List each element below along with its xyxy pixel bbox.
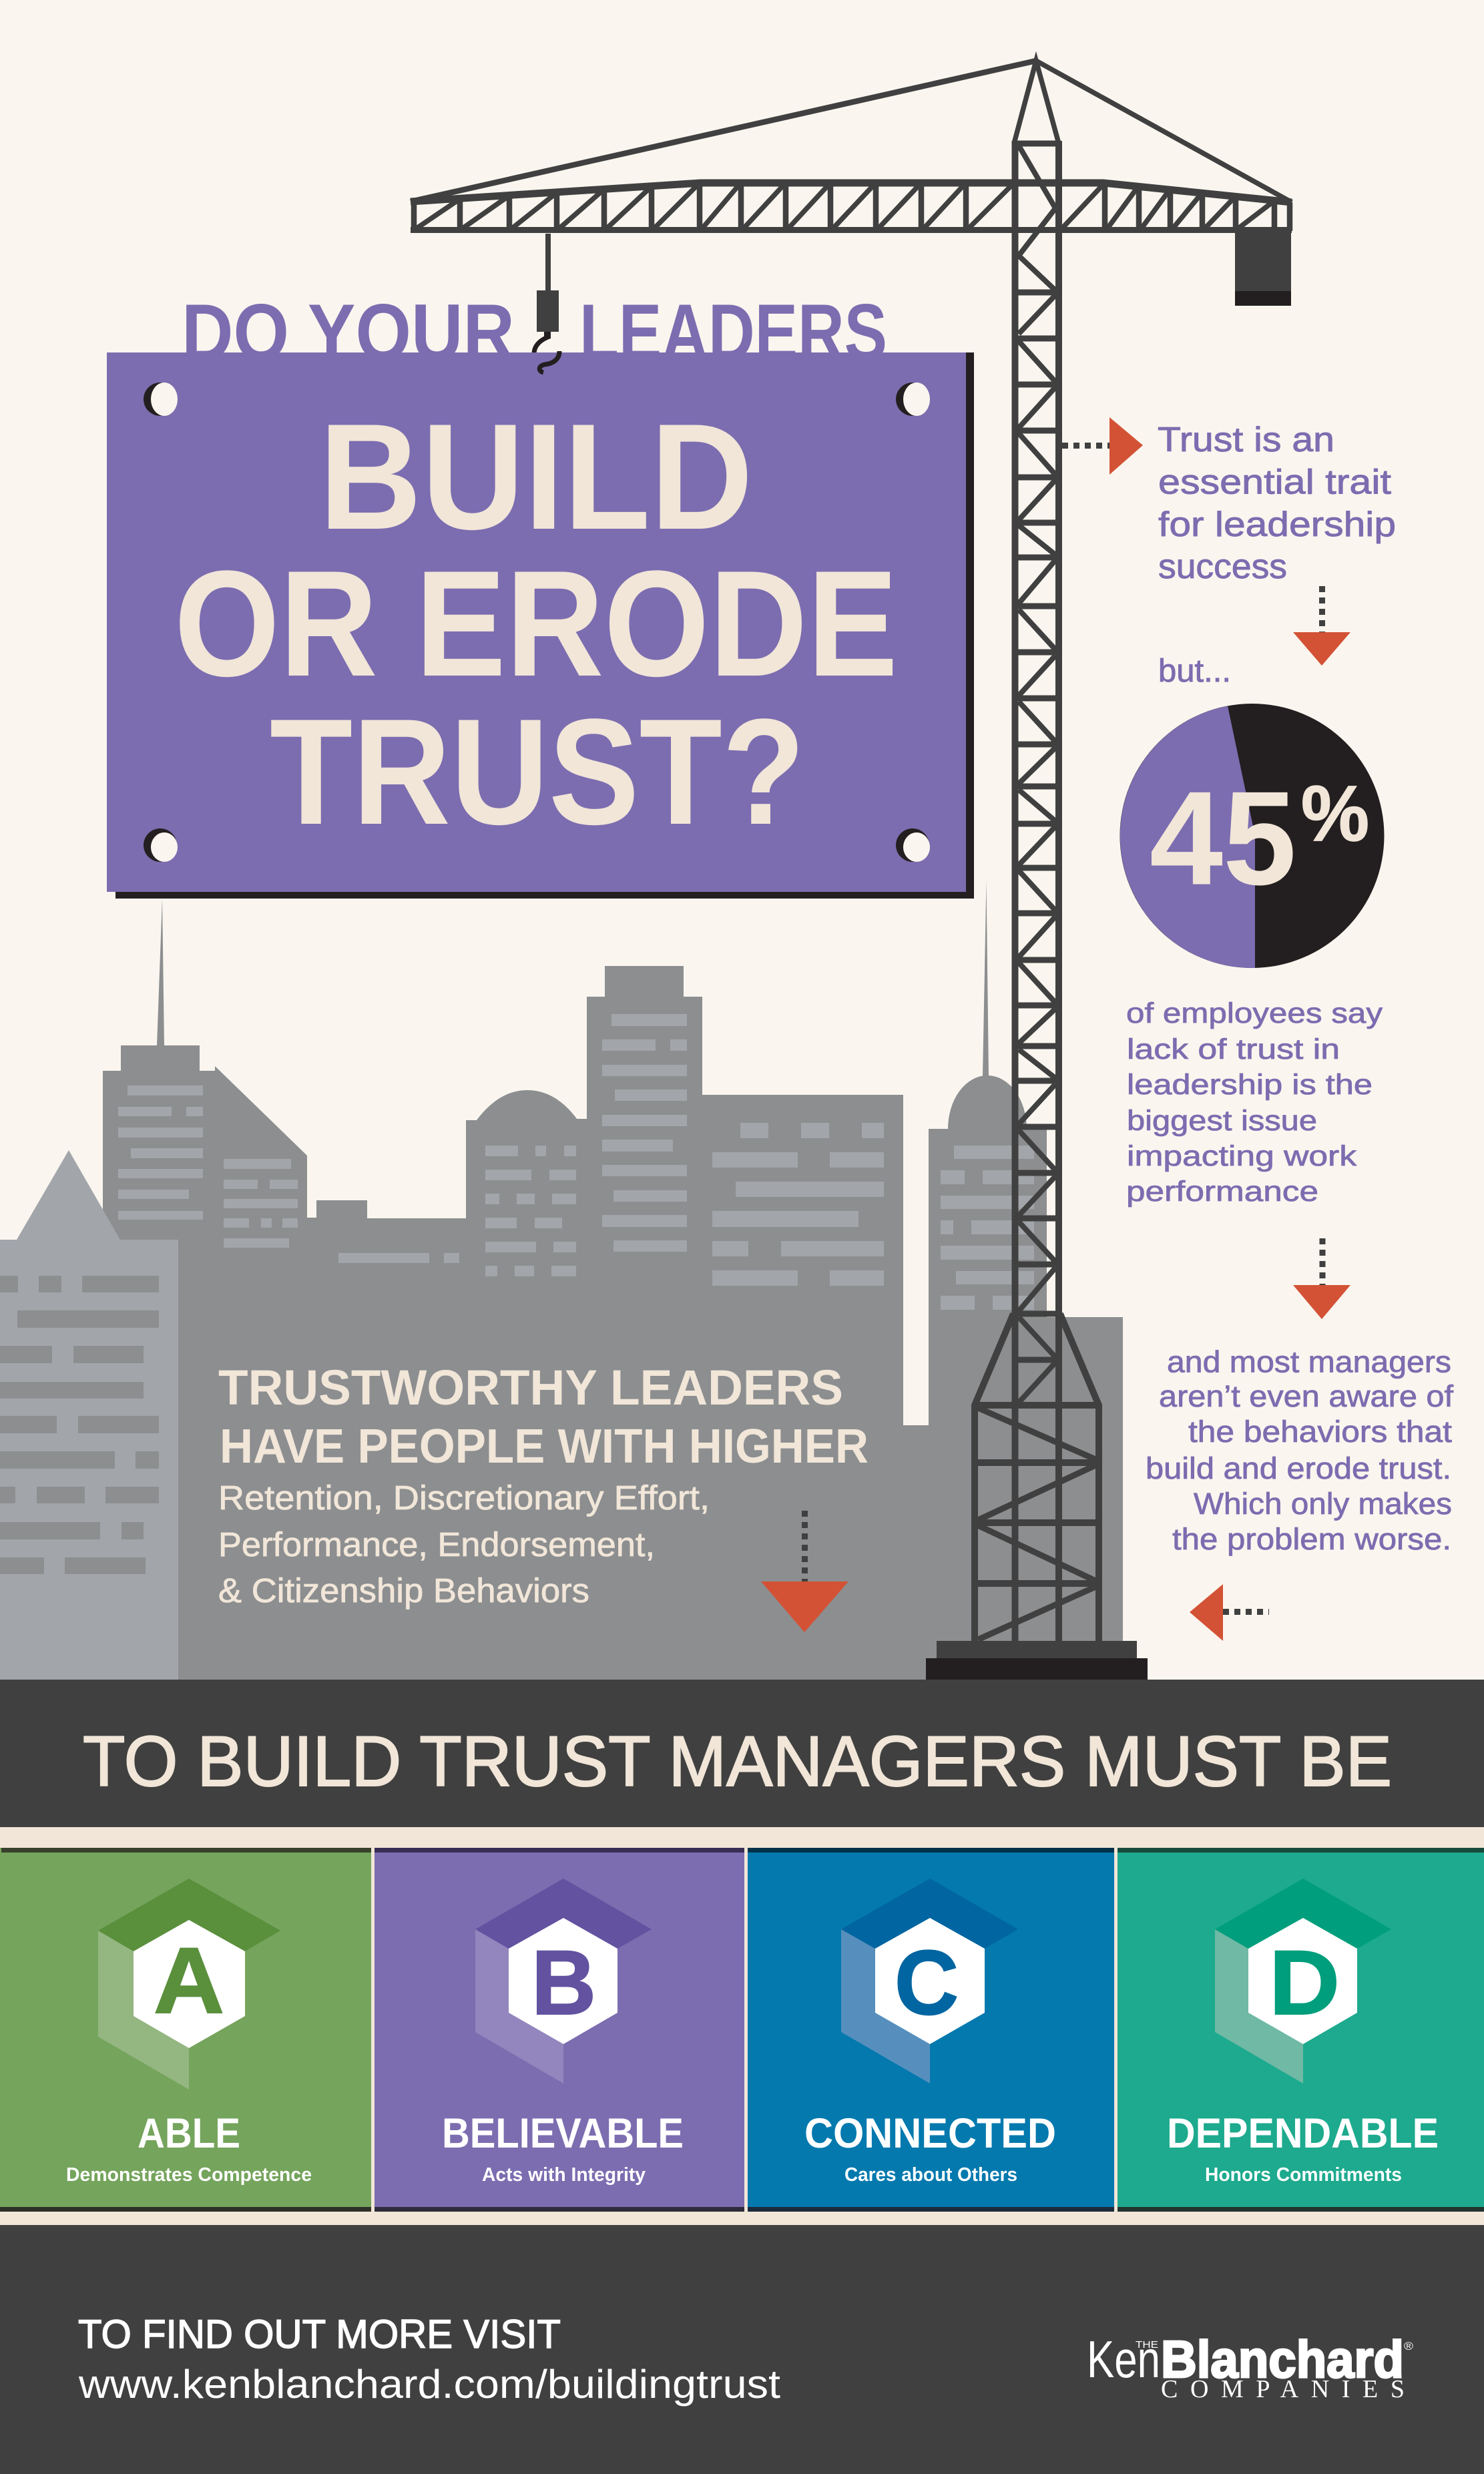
text block: of employees say — [1126, 997, 1383, 1208]
label: demonstrates competence: Demonstrates Competence — [66, 2164, 312, 2186]
crane jib bottom chord — [411, 227, 1292, 233]
icon: D hexagon — [1215, 1879, 1391, 2083]
crane jib diagonals — [417, 185, 1272, 228]
text block: trustworthy leaders: HAVE PEOPLE WITH HIGHER — [220, 1420, 869, 1473]
panel: believable — [375, 1848, 744, 2212]
text block: most managers: the problem worse. — [1172, 1522, 1451, 1556]
heading: do your leaders — [182, 288, 887, 377]
text block: of employees say: lack of trust in — [1127, 1033, 1340, 1065]
crane counterweight — [1235, 232, 1291, 306]
crane jib top chord — [411, 183, 1292, 202]
text block: most managers: and most managers — [1167, 1344, 1451, 1379]
crane — [411, 61, 1292, 1642]
icon: B hexagon — [475, 1879, 652, 2083]
dark buildings silhouette — [103, 899, 1123, 1680]
text block: trustworthy leaders: Performance, Endorsement, — [218, 1525, 655, 1563]
heading: to build trust managers must be: TO BUILD TRUST MANAGERS MUST BE — [83, 1721, 1392, 1801]
panel: purple sign — [107, 352, 966, 892]
arrow: crane to trust text — [1062, 417, 1143, 475]
city skyline — [0, 881, 1123, 1680]
crane jib verticals — [414, 183, 1290, 231]
title: build or erode trust: OR ERODE — [174, 539, 898, 708]
label: honors commitments: Honors Commitments — [1205, 2164, 1402, 2186]
panel: able — [0, 1848, 371, 2212]
text block: most managers: build and erode trust. — [1146, 1451, 1451, 1485]
icon: B hexagon: B — [531, 1932, 596, 2034]
logo: the ken blanchard companies: Blanchard — [1161, 2330, 1404, 2389]
text block: trust is essential — [1158, 421, 1396, 586]
label: able: ABLE — [138, 2110, 240, 2157]
right tower spire — [983, 881, 989, 1076]
text block: trustworthy leaders: & Citizenship Behaviors — [218, 1571, 589, 1610]
crane tower mast legs — [1015, 141, 1059, 1642]
text block: trustworthy leaders: TRUSTWORTHY LEADERS — [218, 1360, 843, 1415]
crane mast diagonal zigzag — [1019, 146, 1055, 1403]
logo: the ken blanchard companies: THE — [1136, 2339, 1158, 2351]
title: build or erode trust — [174, 392, 898, 856]
text block: trustworthy leaders: Retention, Discretionary Effort, — [218, 1479, 710, 1517]
light foreground building — [0, 1150, 178, 1680]
crane mast cross bars — [1013, 144, 1061, 1360]
pie chart: 45 percent — [1120, 704, 1385, 968]
crane right stay cable and mast top — [1014, 61, 1292, 202]
dark building windows — [118, 1014, 1034, 1310]
heading band — [0, 1680, 1484, 1827]
label: believable: BELIEVABLE — [442, 2110, 684, 2157]
text block: trust is essential: Trust is an — [1158, 421, 1334, 459]
text block: most managers — [1146, 1344, 1454, 1556]
crane lower tower struts — [975, 1314, 1099, 1641]
text block: trust is essential: success — [1158, 547, 1287, 586]
icon: crane hook upper part — [534, 336, 549, 354]
label: connected: CONNECTED — [804, 2110, 1056, 2157]
crane lower tower bars — [975, 1405, 1099, 1583]
statistic: percent sign: % — [1301, 770, 1369, 858]
icon: A hexagon — [98, 1879, 280, 2089]
text block: trust is essential: essential trait — [1158, 463, 1392, 502]
logo: the ken blanchard companies: ® — [1404, 2340, 1414, 2353]
label: cares about others: Cares about Others — [844, 2164, 1017, 2186]
heading: do your leaders: LEADERS — [579, 288, 887, 377]
text: but: but... — [1158, 654, 1231, 689]
icon: crane hook and cable — [537, 234, 559, 373]
arrow: down to managers text — [1293, 1238, 1350, 1319]
text block: trustworthy leaders — [218, 1360, 869, 1610]
panel: connected — [748, 1848, 1114, 2212]
arrow: down to but — [1293, 586, 1350, 666]
arrow: down to bottom band — [761, 1511, 848, 1632]
title: build or erode trust: BUILD — [319, 392, 753, 561]
text block: of employees say: of employees say — [1126, 997, 1383, 1029]
text block: most managers: Which only makes — [1194, 1487, 1452, 1521]
logo: the ken blanchard companies — [1087, 2330, 1414, 2403]
text block: most managers: aren’t even aware of — [1159, 1379, 1454, 1413]
crane base — [926, 1641, 1148, 1680]
label: dependable: DEPENDABLE — [1167, 2110, 1439, 2157]
label: acts with integrity: Acts with Integrity — [482, 2164, 646, 2186]
heading: do your leaders: DO YOUR — [182, 288, 515, 377]
footer band — [0, 2225, 1484, 2474]
text block: trust is essential: for leadership — [1158, 505, 1396, 544]
crane lower tower diagonals — [978, 1408, 1095, 1640]
cream strip behind cards — [0, 1827, 1484, 2226]
logo: the ken blanchard companies: Ken — [1087, 2330, 1160, 2389]
icon: D hexagon: D — [1269, 1932, 1340, 2034]
text block: of employees say: performance — [1126, 1176, 1318, 1208]
footer call to action: TO FIND OUT MORE VISIT — [78, 2312, 561, 2357]
text block: of employees say: leadership is the — [1127, 1069, 1373, 1101]
title: build or erode trust: TRUST? — [270, 687, 805, 856]
arrow: left to crane base — [1190, 1584, 1269, 1641]
light building windows — [0, 1276, 159, 1574]
text block: most managers: the behaviors that — [1188, 1415, 1453, 1449]
icon: C hexagon: C — [895, 1932, 959, 2034]
panel: dependable — [1118, 1848, 1484, 2212]
statistic: 45: 45 — [1150, 764, 1296, 913]
icon: C hexagon — [841, 1879, 1018, 2083]
icon: A hexagon: A — [154, 1928, 224, 2033]
footer url: www.kenblanchard.com/buildingtrust — [78, 2362, 780, 2407]
text block: of employees say: biggest issue — [1127, 1105, 1317, 1137]
sign shadow — [115, 352, 974, 899]
text block: of employees say: impacting work — [1127, 1140, 1357, 1172]
crane left stay cable — [411, 61, 1036, 202]
sign bolt holes — [144, 383, 930, 862]
logo: the ken blanchard companies: COMPANIES — [1161, 2375, 1405, 2403]
